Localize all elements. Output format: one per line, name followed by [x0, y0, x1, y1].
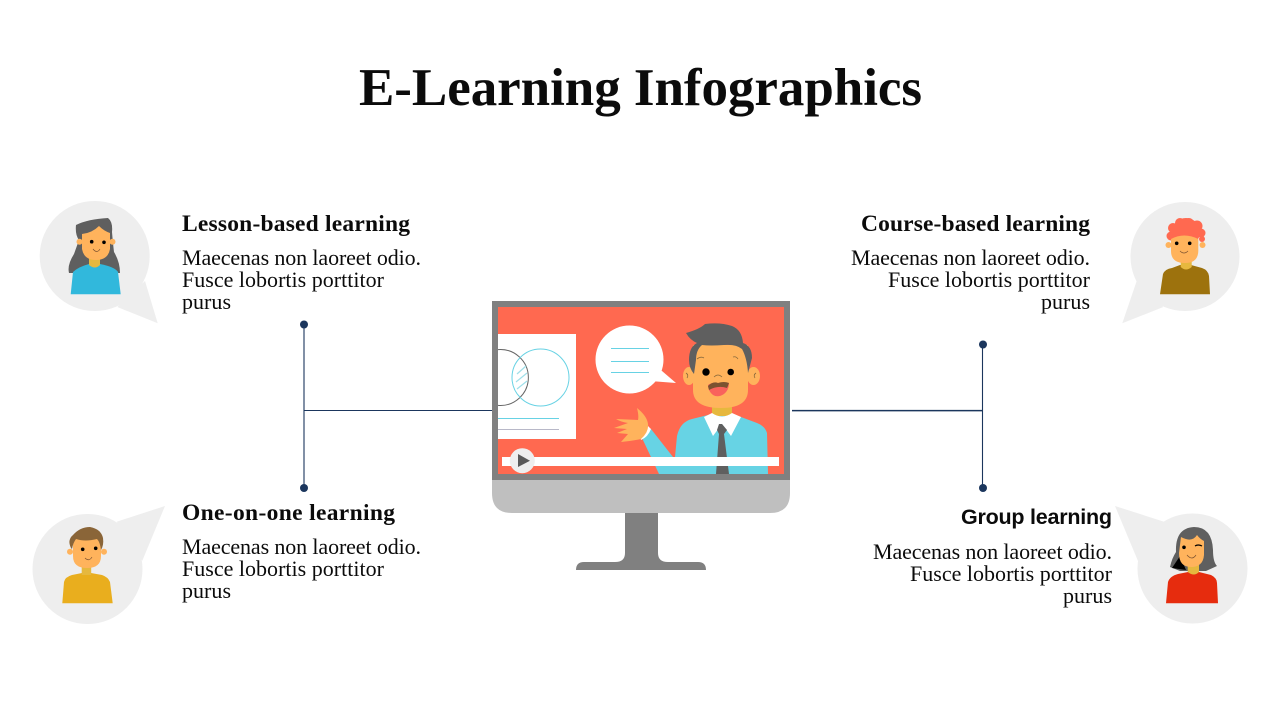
monitor illustration: [492, 301, 790, 570]
connector: left: [300, 320, 497, 492]
body text: Maecenas non laoreet odio.: [182, 534, 421, 559]
panel: group learning: [873, 505, 1248, 624]
avatar bubble: red-haired person: [1122, 202, 1240, 323]
monitor frame: [492, 301, 790, 480]
body text: purus: [1063, 583, 1112, 608]
body text: Maecenas non laoreet odio.: [873, 539, 1112, 564]
connector: right: [792, 340, 987, 492]
body text: Maecenas non laoreet odio.: [851, 245, 1090, 270]
body text: [851, 245, 1091, 314]
panel: course-based learning: [851, 202, 1240, 323]
play button: [510, 448, 535, 473]
body text: purus: [182, 578, 231, 603]
avatar bubble: man in yellow: [32, 506, 165, 624]
body text: Fusce lobortis porttitor: [888, 267, 1091, 292]
slide document with venn diagram: [498, 334, 576, 439]
body text: [873, 539, 1113, 608]
progress bar: [502, 457, 779, 466]
panel: one-on-one learning: [32, 500, 421, 624]
body text: Fusce lobortis porttitor: [182, 267, 385, 292]
heading: Course-based learning: [861, 211, 1090, 237]
panel: lesson-based learning: [40, 201, 421, 323]
screen: [498, 307, 784, 474]
avatar bubble: woman in blue: [40, 201, 158, 323]
body text: [182, 245, 421, 314]
body text: Fusce lobortis porttitor: [910, 561, 1113, 586]
body text: [182, 534, 421, 603]
title: E-Learning Infographics: [359, 59, 922, 117]
body text: Maecenas non laoreet odio.: [182, 245, 421, 270]
body text: Fusce lobortis porttitor: [182, 556, 385, 581]
heading: Lesson-based learning: [182, 211, 410, 237]
monitor chin: [492, 480, 790, 513]
body text: purus: [1041, 289, 1090, 314]
body text: purus: [182, 289, 231, 314]
heading: One-on-one learning: [182, 500, 395, 526]
avatar bubble: woman in red: [1115, 506, 1248, 624]
presenter: [614, 323, 768, 474]
speech bubble: [596, 326, 676, 394]
monitor stand: [576, 513, 706, 570]
heading: Group learning: [961, 505, 1112, 529]
